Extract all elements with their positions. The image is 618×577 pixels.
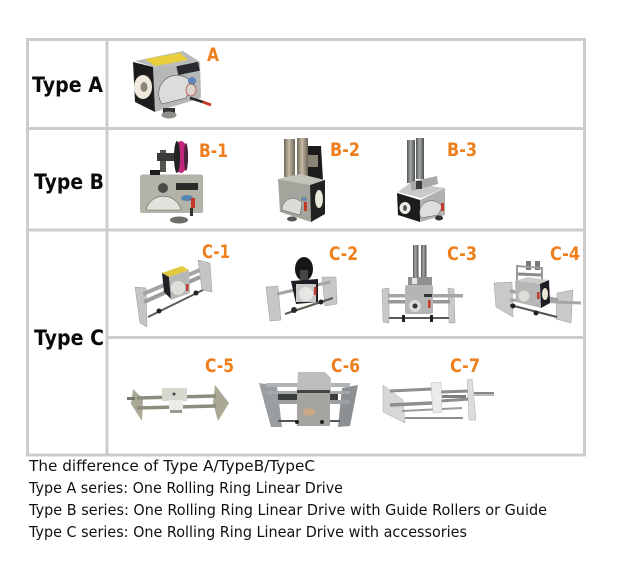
product C-3 [382,244,477,323]
product B-1 [140,141,228,224]
product C-7: C-7 [450,356,480,377]
row heading: Type B: Type B [34,170,104,194]
product C-4 [494,244,581,323]
product B-2 [278,138,360,222]
text block: difference description: The difference of Type A/TypeB/TypeC [28,457,315,475]
product C-2 [266,244,358,321]
text block: difference description: Type C series: One Rolling Ring Linear Drive with accessories [28,523,467,541]
product C-1: C-1 [202,242,230,263]
product B-3 [397,138,477,222]
product C-2: C-2 [329,244,358,265]
text block: difference description [28,457,547,541]
text block: difference description: Type B series: One Rolling Ring Linear Drive with Guide Rollers or Guide [28,501,547,519]
product C-4: C-4 [550,244,580,265]
product C-5 [127,356,234,421]
product A [133,45,220,118]
text block: difference description: Type A series: One Rolling Ring Linear Drive [28,479,343,497]
product C-7 [383,356,494,423]
product C-1 [135,242,230,327]
product B-1: B-1 [199,141,228,162]
product C-6 [259,356,360,427]
product B-2: B-2 [330,140,360,161]
product C-6: C-6 [331,356,360,377]
row heading: Type A: Type A [32,73,104,97]
product C-3: C-3 [447,244,477,265]
product B-3: B-3 [447,140,477,161]
product C-5: C-5 [205,356,234,377]
table grid [27,39,585,455]
row heading: Type C: Type C [34,326,104,350]
product A: A [207,45,220,66]
